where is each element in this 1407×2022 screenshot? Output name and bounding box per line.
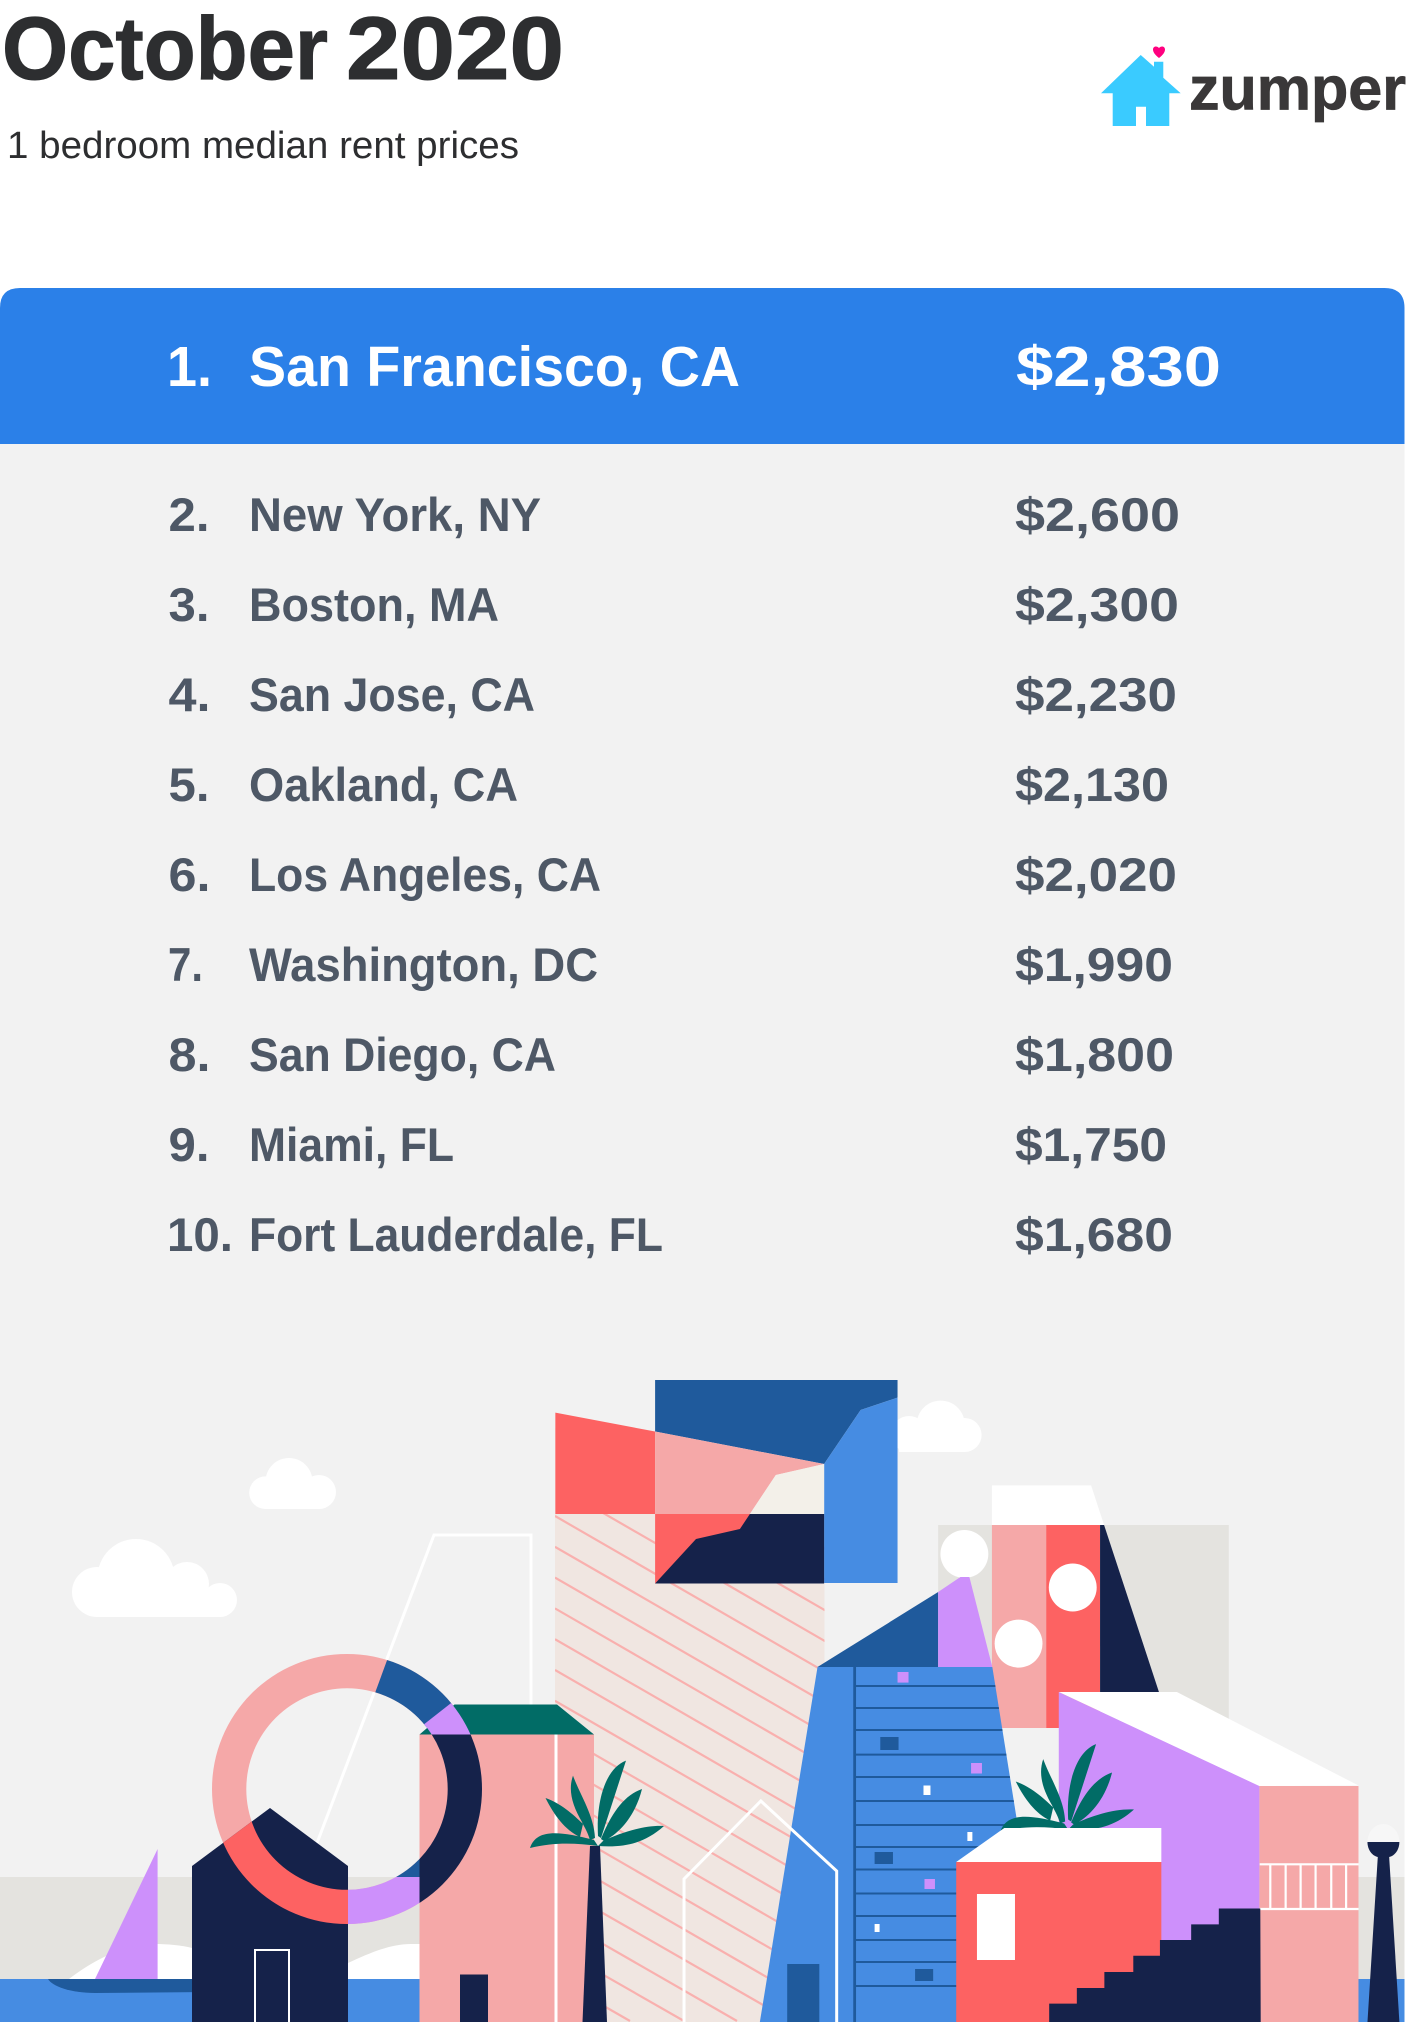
tower body — [760, 1667, 1049, 2022]
navy stairs — [1049, 1908, 1261, 2022]
lamp head — [1367, 1842, 1399, 1857]
row 9: $1,750 — [1015, 1118, 1167, 1171]
pink facet — [655, 1432, 824, 1514]
wall — [420, 1734, 594, 2022]
row 8 — [168, 1028, 1174, 1081]
row 2: $2,600 — [1015, 488, 1180, 541]
cloud large — [72, 1539, 237, 1617]
door — [460, 1974, 488, 2022]
pink side building — [1259, 1786, 1358, 2022]
potted plant — [1000, 1744, 1134, 1832]
row 3 — [168, 578, 1179, 631]
hatched tower — [555, 1514, 824, 2022]
water — [0, 1979, 1404, 2022]
light blue facet — [824, 1398, 898, 1583]
globe — [1367, 1824, 1399, 1842]
sail — [95, 1849, 158, 1979]
cream facet — [750, 1464, 824, 1514]
row 5 — [168, 758, 1169, 811]
tower wall — [555, 1514, 824, 2022]
navy wedge — [1100, 1525, 1159, 1692]
hatch lines — [555, 1514, 824, 2022]
white line — [554, 1734, 558, 2022]
tower roof dark — [818, 1592, 938, 1667]
row 3: $2,300 — [1015, 578, 1179, 631]
red wall — [956, 1862, 1161, 2022]
fronds — [530, 1761, 664, 1848]
row 7 — [168, 938, 1173, 991]
street lamp — [1367, 1824, 1399, 2022]
row 2 — [168, 488, 1180, 541]
city: San Francisco: San Francisco, CA — [249, 335, 740, 399]
ring segment: purple over roof — [424, 1703, 470, 1734]
ring segment: lower blue — [396, 1859, 420, 1877]
ring segment: red — [223, 1822, 348, 1924]
ring segment: blue — [375, 1660, 453, 1728]
wall — [1259, 1786, 1358, 2022]
row 6 — [168, 848, 1177, 901]
striped block — [940, 1485, 1159, 1728]
sailboat — [48, 1849, 210, 1993]
row 6: $2,020 — [1015, 848, 1177, 901]
lower red facet — [655, 1514, 755, 1584]
row 10: Fort Lauderdale, FL — [249, 1208, 663, 1261]
cloud small — [249, 1458, 336, 1509]
pink building — [420, 1704, 594, 2022]
post — [1367, 1856, 1399, 2022]
row 5: $2,130 — [1015, 758, 1169, 811]
hull — [48, 1979, 210, 1993]
row 2: New York, NY — [249, 488, 541, 541]
wordmark: zumper — [1189, 54, 1406, 122]
row 9 — [168, 1118, 1167, 1171]
dark blue facet — [655, 1380, 898, 1464]
roof — [420, 1704, 594, 1734]
blue tower — [760, 1577, 1016, 2022]
row 10: $1,680 — [1015, 1208, 1173, 1261]
icon: heart — [1153, 46, 1165, 58]
panel: ranking background — [0, 420, 1404, 2022]
row 7: $1,990 — [1015, 938, 1173, 991]
ring segment: lower purple — [348, 1877, 420, 1924]
wall — [1059, 1692, 1259, 2022]
row 6: Los Angeles, CA — [249, 848, 601, 901]
windows — [875, 1672, 982, 1981]
row 9: 9. — [168, 1118, 210, 1171]
row 4: $2,230 — [1015, 668, 1177, 721]
ring segment: navy over building — [420, 1734, 482, 1903]
row 6: 6. — [168, 848, 210, 901]
white outline building — [317, 1535, 531, 1843]
row 8: 8. — [168, 1028, 210, 1081]
icon: house — [1101, 55, 1181, 126]
panel: top city highlight — [0, 288, 1404, 444]
row 5: 5. — [168, 758, 210, 811]
white outline house — [684, 1801, 837, 2022]
title: 2020 — [346, 0, 564, 98]
navy house — [192, 1808, 348, 2022]
row 4: San Jose, CA — [249, 668, 535, 721]
pink column — [992, 1525, 1046, 1728]
row 2: 2. — [168, 488, 210, 541]
row 10 — [167, 1208, 1173, 1261]
red building — [956, 1828, 1161, 2022]
row 7: 7. — [168, 938, 203, 991]
abstract top block — [555, 1380, 898, 1584]
tower roof purple — [938, 1577, 992, 1667]
price: San Francisco: $2,830 — [1016, 335, 1221, 399]
row 4 — [168, 668, 1177, 721]
circles — [940, 1530, 1097, 1668]
ring back — [212, 1654, 482, 1924]
header bar — [0, 288, 1404, 444]
cloud behind block — [891, 1401, 982, 1452]
trunk — [582, 1846, 607, 2022]
white window — [977, 1894, 1015, 1960]
rank 1: 1. — [167, 335, 212, 399]
tower door — [787, 1964, 819, 2022]
row 3: 3. — [168, 578, 210, 631]
illustration: cityscape — [0, 1362, 1404, 2022]
house door — [255, 1950, 289, 2022]
ranking list — [167, 488, 1180, 1261]
red facet — [555, 1413, 655, 1514]
palm tree — [530, 1761, 664, 2022]
row 9: Miami, FL — [249, 1118, 454, 1171]
purple building — [1059, 1692, 1358, 2022]
white roof — [1059, 1692, 1358, 1786]
red column — [1046, 1525, 1100, 1728]
row 8: $1,800 — [1015, 1028, 1174, 1081]
row 8: San Diego, CA — [249, 1028, 556, 1081]
navy facet — [655, 1514, 824, 1584]
row 5: Oakland, CA — [249, 758, 518, 811]
ground band — [0, 1877, 1404, 1979]
title — [2, 0, 564, 98]
row 7: Washington, DC — [249, 938, 598, 991]
row 10: 10. — [167, 1208, 233, 1261]
title: October — [2, 0, 328, 98]
railing — [1260, 1864, 1358, 1909]
row 4: 4. — [168, 668, 210, 721]
row 3: Boston, MA — [249, 578, 499, 631]
grey backdrop — [938, 1525, 1229, 1720]
zumper logo — [1101, 46, 1406, 126]
white top — [956, 1828, 1161, 1862]
right-hand city cluster — [555, 1380, 1399, 2022]
white cap — [992, 1485, 1104, 1525]
floor lines — [853, 1667, 1014, 2022]
subtitle: 1 bedroom median rent prices — [7, 125, 519, 167]
hills — [69, 1944, 420, 1979]
